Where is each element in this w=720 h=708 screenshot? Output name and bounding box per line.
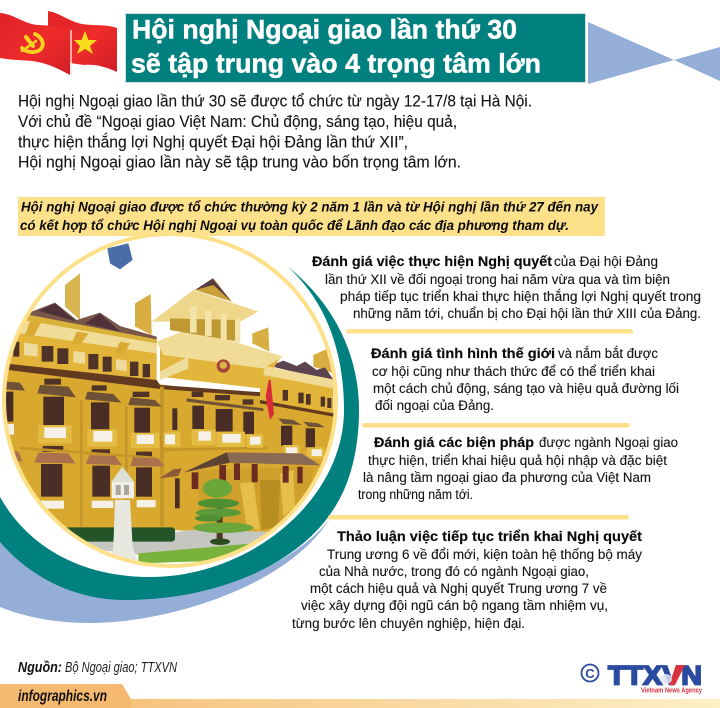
panel: point 1: [312, 254, 701, 322]
chimneys: [65, 273, 80, 320]
panel: point 1: pháp tiếp tục triển khai thực hiện thắng lợi Nghị quyết trong: [340, 288, 701, 305]
panel: point 2: một cách chủ động, sáng tạo và hiệu quả đường lối: [373, 381, 679, 397]
top windows: [13, 342, 331, 457]
icon: blue triangles: [588, 22, 720, 84]
right wing upper: [260, 376, 334, 413]
panel: point 3: được ngành Ngoại giao: [539, 435, 678, 451]
panel: point 1: lần thứ XII về đối ngoại trong hai năm vừa qua và tìm biện: [325, 272, 670, 288]
panel: point 3: [358, 435, 678, 503]
crest: [217, 359, 230, 373]
panel: point 3: là nâng tầm ngoại giao đa phương của Việt Nam: [363, 470, 651, 486]
panel: point 1: của Đại hội Đảng: [554, 254, 658, 270]
panel: point 2: Đánh giá tình hình thế giới: [371, 346, 555, 362]
panel: point 2: cơ hội cũng như thách thức để có thể triển khai: [372, 364, 655, 380]
icon: hammer and sickle: [22, 34, 43, 52]
callout: highlighted note: Hội nghị Ngoại giao được tổ chức thường kỳ 2 năm 1 lần và từ Hội nghị lần thứ 27 đến nay: [21, 198, 599, 214]
logo: TTXVN: C: [585, 666, 595, 681]
icon: flags: [0, 11, 117, 75]
callout: highlighted note: [18, 197, 605, 236]
roofs: [28, 303, 157, 342]
title: sẽ tập trung vào 4 trọng tâm lớn: [131, 48, 541, 78]
decorative crescents: [0, 266, 359, 623]
photo: Foreign Ministry building: [0, 230, 340, 570]
wall shading: [20, 387, 267, 527]
awnings: [5, 382, 325, 427]
palm leaf: [107, 243, 133, 269]
logo: TTXVN: TTXVN: [608, 660, 702, 690]
second-floor windows: [5, 392, 315, 508]
porch: [197, 467, 313, 530]
intro text: [18, 92, 532, 172]
panel: point 1: Đánh giá việc thực hiện Nghị quyết: [312, 254, 552, 270]
title: [126, 14, 586, 82]
panel: point 4: [292, 529, 643, 632]
source: Nguồn:: [18, 659, 62, 676]
panel: point 3: Đánh giá các biện pháp: [374, 435, 534, 451]
intro text: thực hiện thắng lợi Nghị quyết Đại hội Đảng lần thứ XII”,: [18, 132, 408, 152]
panel: point 4: từng bước lên chuyên nghiệp, hiện đại.: [292, 616, 525, 632]
panel: point 2: đối ngoại của Đảng.: [375, 398, 494, 414]
flag: [266, 380, 274, 420]
panel: point 2: [371, 345, 679, 414]
icon: star: [74, 31, 97, 54]
lamp: [112, 500, 137, 560]
panel: point 3: trong những năm tới.: [358, 487, 473, 503]
panel: point 4: việc xây dựng đội ngũ cán bộ ngang tầm nhiệm vụ,: [301, 598, 608, 614]
dormers: [38, 303, 77, 322]
footer bar: infographics.vn: [18, 688, 107, 705]
intro text: Với chủ đề “Ngoại giao Việt Nam: Chủ động, sáng tạo, hiệu quả,: [18, 113, 457, 131]
panel: point 4: Thảo luận việc tiếp tục triển khai Nghị quyết: [337, 529, 642, 545]
panel: point 4: của Nhà nước, trong đó có ngành Ngoại giao,: [319, 564, 589, 580]
source: Bộ Ngoại giao; TTXVN: [65, 659, 177, 676]
panels: [24, 343, 188, 380]
panel: point 1: những năm tới, chuẩn bị cho Đại hội lần thứ XIII của Đảng.: [353, 306, 701, 322]
footer bar: [0, 684, 720, 708]
pavement and hedge: [88, 530, 270, 555]
source: [18, 659, 177, 676]
logo: TTXVN: Vietnam News Agency: [641, 688, 702, 694]
intro text: Hội nghị Ngoại giao lần thứ 30 sẽ được tổ chức từ ngày 12-17/8 tại Hà Nội.: [18, 92, 532, 110]
panel: point 2: và nắm bắt được: [558, 345, 658, 362]
panel: point 4: Trung ương 6 về đổi mới, kiện toàn hệ thống bộ máy: [327, 547, 643, 563]
main walls: [0, 364, 337, 537]
callout: highlighted note: có kết hợp tổ chức Hội nghị Ngoại vụ toàn quốc để Lãnh đạo các địa phương tham dự.: [20, 217, 569, 233]
title: Hội nghị Ngoại giao lần thứ 30: [132, 14, 517, 44]
balconies: [38, 425, 324, 459]
logo: TTXVN: [582, 660, 702, 694]
panel: point 3: thực hiện, triển khai hiệu quả hội nhập và đặc biệt: [368, 453, 667, 469]
tree: [216, 508, 223, 539]
panel: point 4: một cách hiệu quả và Nghị quyết Trung ương 7 về: [310, 581, 607, 597]
central tower: [160, 348, 280, 388]
intro text: Hội nghị Ngoại giao lần này sẽ tập trung vào bốn trọng tâm lớn.: [18, 154, 461, 172]
